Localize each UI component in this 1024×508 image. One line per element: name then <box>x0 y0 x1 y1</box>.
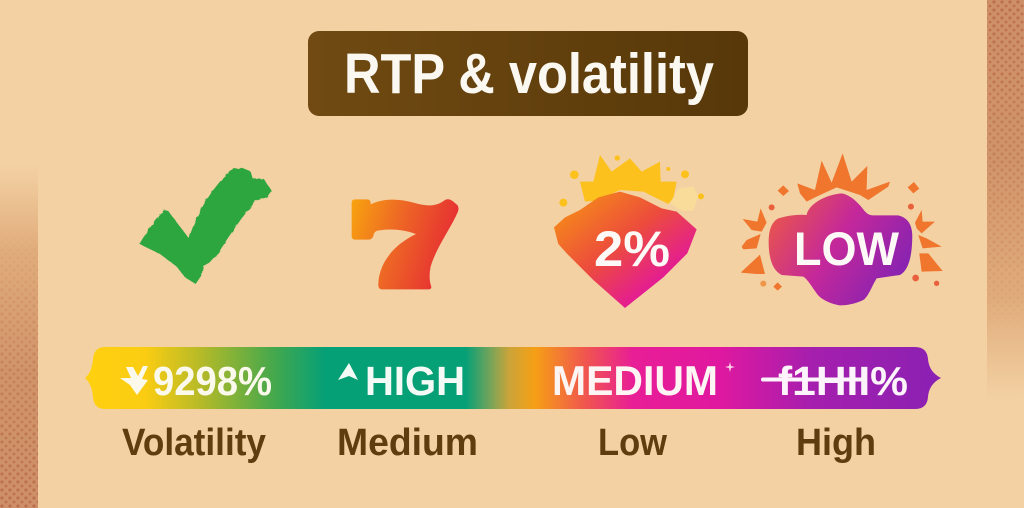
label: High: High <box>796 422 876 464</box>
bar shape <box>85 347 941 409</box>
9298% segment <box>120 358 272 404</box>
label: Low: Low <box>598 422 667 464</box>
LOW label: LOW <box>794 222 900 275</box>
label: Medium: Medium <box>337 422 478 464</box>
icon: up arrow <box>338 363 358 380</box>
pale splash beside crown <box>670 187 698 211</box>
crown sparkles <box>559 155 704 207</box>
HIGH segment <box>338 358 465 404</box>
scale labels <box>122 422 876 464</box>
orange-red dots <box>760 204 939 287</box>
gradient scale bar <box>85 347 941 409</box>
icon: LOW badge with burst <box>741 153 943 305</box>
yellow crown <box>580 155 677 204</box>
garbled value: f1HII% <box>778 358 908 404</box>
strike line <box>763 378 865 382</box>
HIGH value: HIGH <box>365 358 465 404</box>
icon: 2% heart badge with crown <box>554 155 704 308</box>
icon: lucky seven <box>352 199 458 289</box>
icon: green check mark <box>139 168 272 284</box>
purple blob <box>769 193 912 305</box>
title panel <box>308 31 748 116</box>
icon: sparkle <box>725 362 735 372</box>
title text: RTP & volatility <box>344 42 714 106</box>
title <box>308 31 748 116</box>
heart shape <box>554 192 697 308</box>
label: Volatility: Volatility <box>122 422 266 464</box>
MEDIUM value: MEDIUM <box>552 357 718 404</box>
orange burst rays <box>741 153 943 291</box>
9298% value: 9298% <box>153 358 272 404</box>
left textured strip <box>0 165 38 508</box>
right textured strip <box>987 0 1024 400</box>
icon: down arrow <box>120 366 148 395</box>
2% label: 2% <box>594 221 670 277</box>
